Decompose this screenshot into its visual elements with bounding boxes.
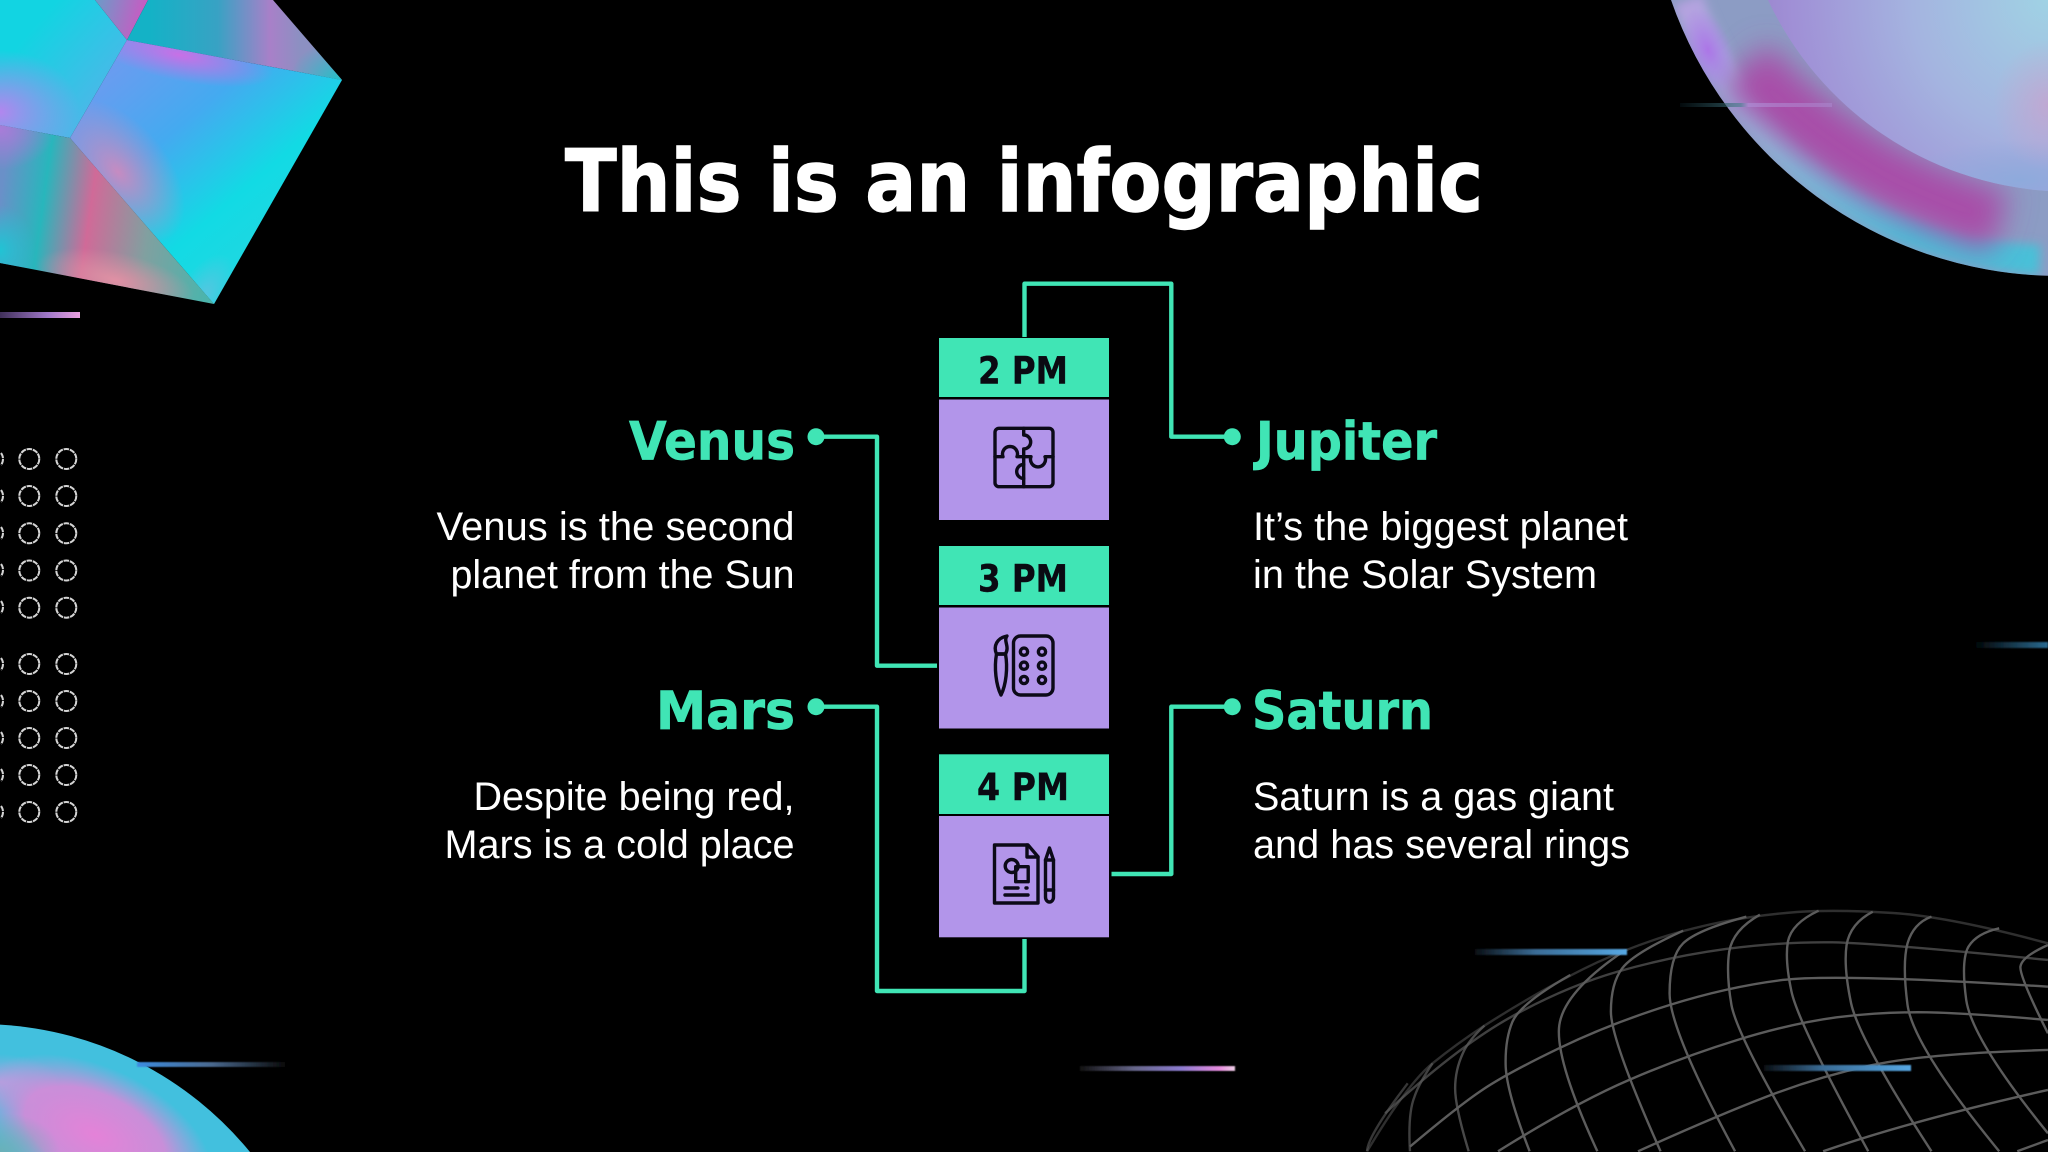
connector: 4 PM to Saturn (1112, 707, 1232, 874)
icon: brush and palette (995, 636, 1053, 695)
marker: Venus dot (808, 428, 824, 445)
decoration: gradient sphere bottom left (0, 1024, 250, 1152)
item: Venus (436, 411, 824, 597)
panel: 3 PM: 3 PM (978, 558, 1068, 601)
text: Saturn description: Saturn is a gas giant (1253, 775, 1614, 819)
heading: Mars: Mars (656, 681, 795, 742)
panel: 3 PM (939, 546, 1109, 728)
text: Venus description: Venus is the second (436, 505, 794, 549)
text: Mars description: Despite being red, (474, 775, 794, 819)
marker: Jupiter dot (1224, 428, 1241, 445)
item: Mars (444, 681, 824, 867)
marker: Mars dot (808, 698, 824, 715)
icon: document and pencil (994, 845, 1054, 903)
connector: 3 PM to Venus (816, 437, 937, 666)
panel: 2 PM: 2 PM (978, 350, 1068, 393)
text: Saturn description: and has several rings (1253, 823, 1630, 867)
text: Jupiter description: in the Solar System (1253, 553, 1597, 597)
item: Jupiter (1224, 411, 1628, 597)
title: This is an infographic (565, 132, 1483, 232)
panel: 2 PM (939, 338, 1109, 520)
decoration: gradient crystal cube (0, 0, 344, 306)
item: Saturn (1224, 681, 1630, 867)
panel: 4 PM: 4 PM (977, 766, 1069, 809)
decoration: gradient sphere top right (1660, 0, 2048, 276)
heading: Venus: Venus (629, 411, 795, 472)
text: Venus description: planet from the Sun (450, 553, 794, 597)
text: Jupiter description: It’s the biggest planet (1253, 505, 1628, 549)
decoration: wireframe globe (1367, 911, 2048, 1151)
connector: 2 PM to Jupiter (1024, 284, 1232, 437)
panel: 4 PM (939, 754, 1109, 937)
icon: puzzle (995, 428, 1053, 487)
heading: Saturn: Saturn (1252, 681, 1433, 742)
text: Mars description: Mars is a cold place (444, 823, 794, 867)
marker: Saturn dot (1224, 698, 1241, 715)
heading: Jupiter: Jupiter (1253, 411, 1437, 472)
decoration: dotted circle grid (1, 449, 76, 822)
connector: 4 PM to Mars (816, 707, 1024, 991)
